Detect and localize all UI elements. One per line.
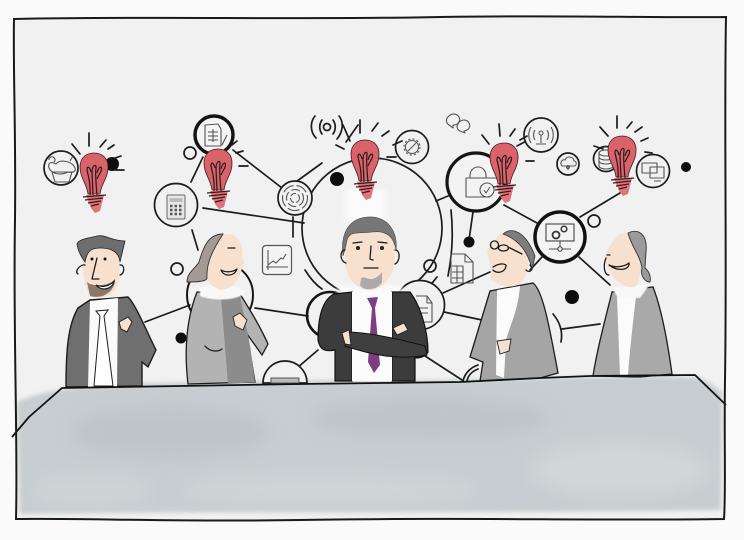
person 3 hands xyxy=(342,323,408,345)
network of connector lines xyxy=(145,138,625,381)
person 5 shirt xyxy=(617,297,636,375)
table wash xyxy=(17,377,722,514)
person 2 inner dark panel xyxy=(221,296,255,384)
bulb 4 xyxy=(482,124,534,203)
person 3 goatee xyxy=(360,272,382,289)
person 1 hand xyxy=(119,317,132,332)
person 3: central man in dark suit xyxy=(318,217,428,381)
person 3 crossed arms xyxy=(345,332,427,357)
person 4 shirt xyxy=(496,286,520,378)
person 2 jacket xyxy=(186,292,268,384)
person 4 hand xyxy=(497,339,511,354)
icon: speech bubbles xyxy=(446,114,470,133)
person 4 glasses and mouth xyxy=(490,241,532,272)
icon: gear xyxy=(396,130,428,164)
ring behind second person xyxy=(187,262,253,328)
person 2 features xyxy=(221,248,237,275)
icon: wireless broadcast xyxy=(311,116,358,142)
icon: spreadsheet file xyxy=(451,254,473,283)
person 4 hair xyxy=(503,231,535,270)
person 1 tie xyxy=(94,310,113,386)
circle with document behind central person xyxy=(396,280,444,330)
person 3 tie xyxy=(367,297,380,373)
person 3 face xyxy=(345,228,395,290)
icon: connected monitors xyxy=(636,154,670,188)
person 5 features xyxy=(604,255,629,275)
icon: document in thick ring xyxy=(195,116,233,154)
black dots xyxy=(105,157,691,344)
person 3 features xyxy=(341,242,399,268)
table top edge line xyxy=(12,375,726,437)
highlight glow behind central bulb xyxy=(345,190,385,220)
person 2 face xyxy=(206,234,244,290)
person 5 jacket xyxy=(593,287,672,377)
person 1 jacket xyxy=(66,297,156,387)
person 5: woman with ponytail xyxy=(593,231,672,377)
person 5 face xyxy=(605,232,641,287)
person 5 collar xyxy=(612,284,650,298)
icon: antenna xyxy=(524,118,558,152)
icon: monitor with gears in thick ring xyxy=(535,212,585,262)
icon: cupcake xyxy=(44,151,78,185)
person 5 hair xyxy=(628,231,650,282)
person 2 collar xyxy=(200,285,246,299)
icon: calculator xyxy=(154,184,198,226)
bottom circle with monitor xyxy=(263,361,307,383)
person 1: bearded man xyxy=(66,236,156,388)
person 4 jacket xyxy=(470,283,558,381)
icon: line chart xyxy=(262,246,292,274)
bulb 3 xyxy=(336,120,402,200)
person 2: long-haired woman xyxy=(186,234,268,384)
person 3 hair xyxy=(342,217,396,256)
icon: database xyxy=(594,146,618,172)
person 4: man with glasses xyxy=(470,231,558,381)
person 3 glow halo xyxy=(338,285,402,305)
person 1 shirt xyxy=(88,298,118,388)
bulb 1 xyxy=(72,133,124,213)
bulb 5 xyxy=(594,116,652,196)
icon: cloud xyxy=(557,153,579,175)
bulbs with rays xyxy=(72,116,652,213)
person 1 head xyxy=(83,242,120,297)
icon: padlock in thick ring xyxy=(447,153,505,211)
person 2 hair xyxy=(187,234,223,282)
person 1 hair xyxy=(77,236,125,262)
person 3 shirt xyxy=(352,292,392,381)
bulb 2 xyxy=(204,141,248,209)
person 3 jacket xyxy=(318,292,428,381)
large central ring xyxy=(302,158,442,298)
thick ring behind central person xyxy=(307,292,353,338)
person 1 features xyxy=(77,258,124,279)
person 2 hand xyxy=(233,313,247,330)
person 4 face xyxy=(487,233,528,287)
small empty circles xyxy=(171,147,600,275)
person 1 beard xyxy=(87,280,115,297)
icon: maze target xyxy=(278,181,312,215)
